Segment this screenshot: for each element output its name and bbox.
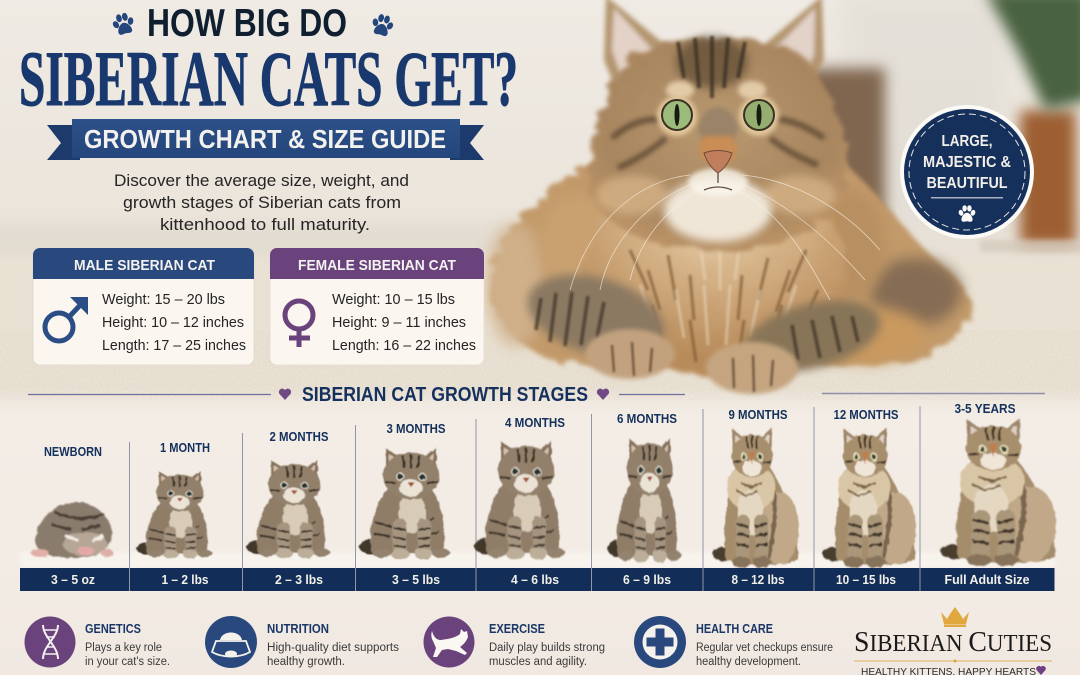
intro text: Discover the average size, weight, and xyxy=(114,171,409,190)
stage: 6 months xyxy=(608,411,682,563)
panel: female: FEMALE SIBERIAN CAT xyxy=(298,257,456,274)
factor: genetics: GENETICS xyxy=(85,621,141,636)
stage: 2 months: 2 MONTHS xyxy=(270,429,329,444)
panel: male: MALE SIBERIAN CAT xyxy=(74,257,215,274)
section heading: growth stages: SIBERIAN CAT GROWTH STAGES xyxy=(302,384,588,406)
factor: health care: HEALTH CARE xyxy=(696,621,773,636)
weight bar: 6 – 9 lbs xyxy=(623,572,671,587)
stage: 12 months xyxy=(822,407,916,568)
stage: 4 months: 4 MONTHS xyxy=(505,415,565,430)
factor: exercise: muscles and agility. xyxy=(489,656,587,668)
icon: medical cross xyxy=(634,616,686,668)
face xyxy=(657,96,779,196)
stage: 6 months: 6 MONTHS xyxy=(617,411,677,426)
factor: nutrition: healthy growth. xyxy=(267,656,345,668)
panel: male: Weight: 15 – 20 lbs xyxy=(102,291,225,308)
icon: dna xyxy=(24,616,76,668)
title xyxy=(19,2,518,122)
stage: 3 months: 3 MONTHS xyxy=(386,421,446,436)
stage: 9 months: 9 MONTHS xyxy=(728,407,788,422)
stage: newborn: NEWBORN xyxy=(44,444,102,459)
section heading: growth stages xyxy=(28,384,1045,406)
ears xyxy=(604,0,824,100)
factor: genetics: Plays a key role xyxy=(85,642,162,654)
whiskers xyxy=(570,175,880,300)
factor: health care: healthy development. xyxy=(696,656,801,668)
factor: nutrition xyxy=(205,616,399,668)
head xyxy=(588,36,849,250)
badge: MAJESTIC & xyxy=(923,154,1011,171)
factor: exercise: EXERCISE xyxy=(489,621,545,636)
icon: left paw xyxy=(110,11,137,37)
stage: 3-5 years xyxy=(941,401,1056,566)
toe lines xyxy=(612,342,773,392)
icon: right heart xyxy=(597,389,609,400)
weight bar: 3 – 5 oz xyxy=(51,572,95,587)
weight bar: Full Adult Size xyxy=(944,572,1030,587)
stage: 1 month xyxy=(136,440,212,559)
logo xyxy=(854,607,1052,675)
panel: female: Weight: 10 – 15 lbs xyxy=(332,291,455,308)
stage: 4 months xyxy=(474,415,565,560)
intro text xyxy=(114,171,409,234)
stage: 12 months: 12 MONTHS xyxy=(834,407,899,422)
panel: male: Length: 17 – 25 inches xyxy=(102,337,246,354)
blurred room background xyxy=(0,0,1080,393)
panel: female: Height: 9 – 11 inches xyxy=(332,314,466,331)
weight bar: 10 – 15 lbs xyxy=(836,572,896,587)
paws xyxy=(585,329,798,394)
panel: male: Height: 10 – 12 inches xyxy=(102,314,244,331)
hero cat photo xyxy=(486,0,970,394)
stage: 2 months xyxy=(246,429,330,558)
factor: genetics xyxy=(24,616,170,668)
factor: exercise xyxy=(424,616,605,668)
factor: nutrition: High-quality diet supports xyxy=(267,642,399,654)
icon: logo heart xyxy=(1036,666,1046,675)
factor: health care: Regular vet checkups ensure xyxy=(696,642,833,654)
panel: male xyxy=(33,248,254,365)
icon: female symbol xyxy=(285,301,313,347)
icon: food bowl xyxy=(205,616,257,668)
ribbon banner xyxy=(47,119,484,160)
stage floor shading xyxy=(20,552,1055,568)
front legs xyxy=(518,260,888,384)
logo: SIBERIAN CUTIES xyxy=(854,626,1052,658)
badge: BEAUTIFUL xyxy=(926,175,1008,192)
ribbon banner: GROWTH CHART & SIZE GUIDE xyxy=(84,124,446,154)
intro text: growth stages of Siberian cats from xyxy=(123,193,401,212)
chest fur xyxy=(584,168,848,376)
cat body xyxy=(486,150,970,367)
icon: male symbol xyxy=(45,297,88,341)
weight bar: 4 – 6 lbs xyxy=(511,572,559,587)
factor: genetics: in your cat's size. xyxy=(85,656,170,668)
weight bar xyxy=(20,568,1054,591)
stage: 9 months xyxy=(713,407,799,568)
title line 2: SIBERIAN CATS GET? xyxy=(19,35,518,122)
icon: crown xyxy=(941,607,969,627)
factor: exercise: Daily play builds strong xyxy=(489,642,605,654)
icon: left heart xyxy=(279,389,291,400)
factor: nutrition: NUTRITION xyxy=(267,621,329,636)
icon: running cat xyxy=(424,616,474,668)
badge: LARGE, xyxy=(942,133,992,150)
dividers xyxy=(130,406,920,568)
stage: 1 month: 1 MONTH xyxy=(160,440,210,455)
badge xyxy=(900,105,1034,239)
growth stages chart xyxy=(20,401,1056,591)
weight bar: 1 – 2 lbs xyxy=(162,572,208,587)
panel: female: Length: 16 – 22 inches xyxy=(332,337,476,354)
weight bar: 2 – 3 lbs xyxy=(275,572,323,587)
weight bar: 8 – 12 lbs xyxy=(732,572,784,587)
weight bar: 3 – 5 lbs xyxy=(392,572,440,587)
stage: 3-5 years: 3-5 YEARS xyxy=(954,401,1016,416)
title line 1: HOW BIG DO xyxy=(147,2,347,45)
intro text: kittenhood to full maturity. xyxy=(160,215,370,234)
stage: newborn xyxy=(31,444,113,558)
factor: health care xyxy=(634,616,833,668)
carpet texture xyxy=(0,330,1080,400)
panel: female xyxy=(270,248,484,365)
icon: right paw xyxy=(369,12,396,38)
stage: 3 months xyxy=(359,421,450,560)
